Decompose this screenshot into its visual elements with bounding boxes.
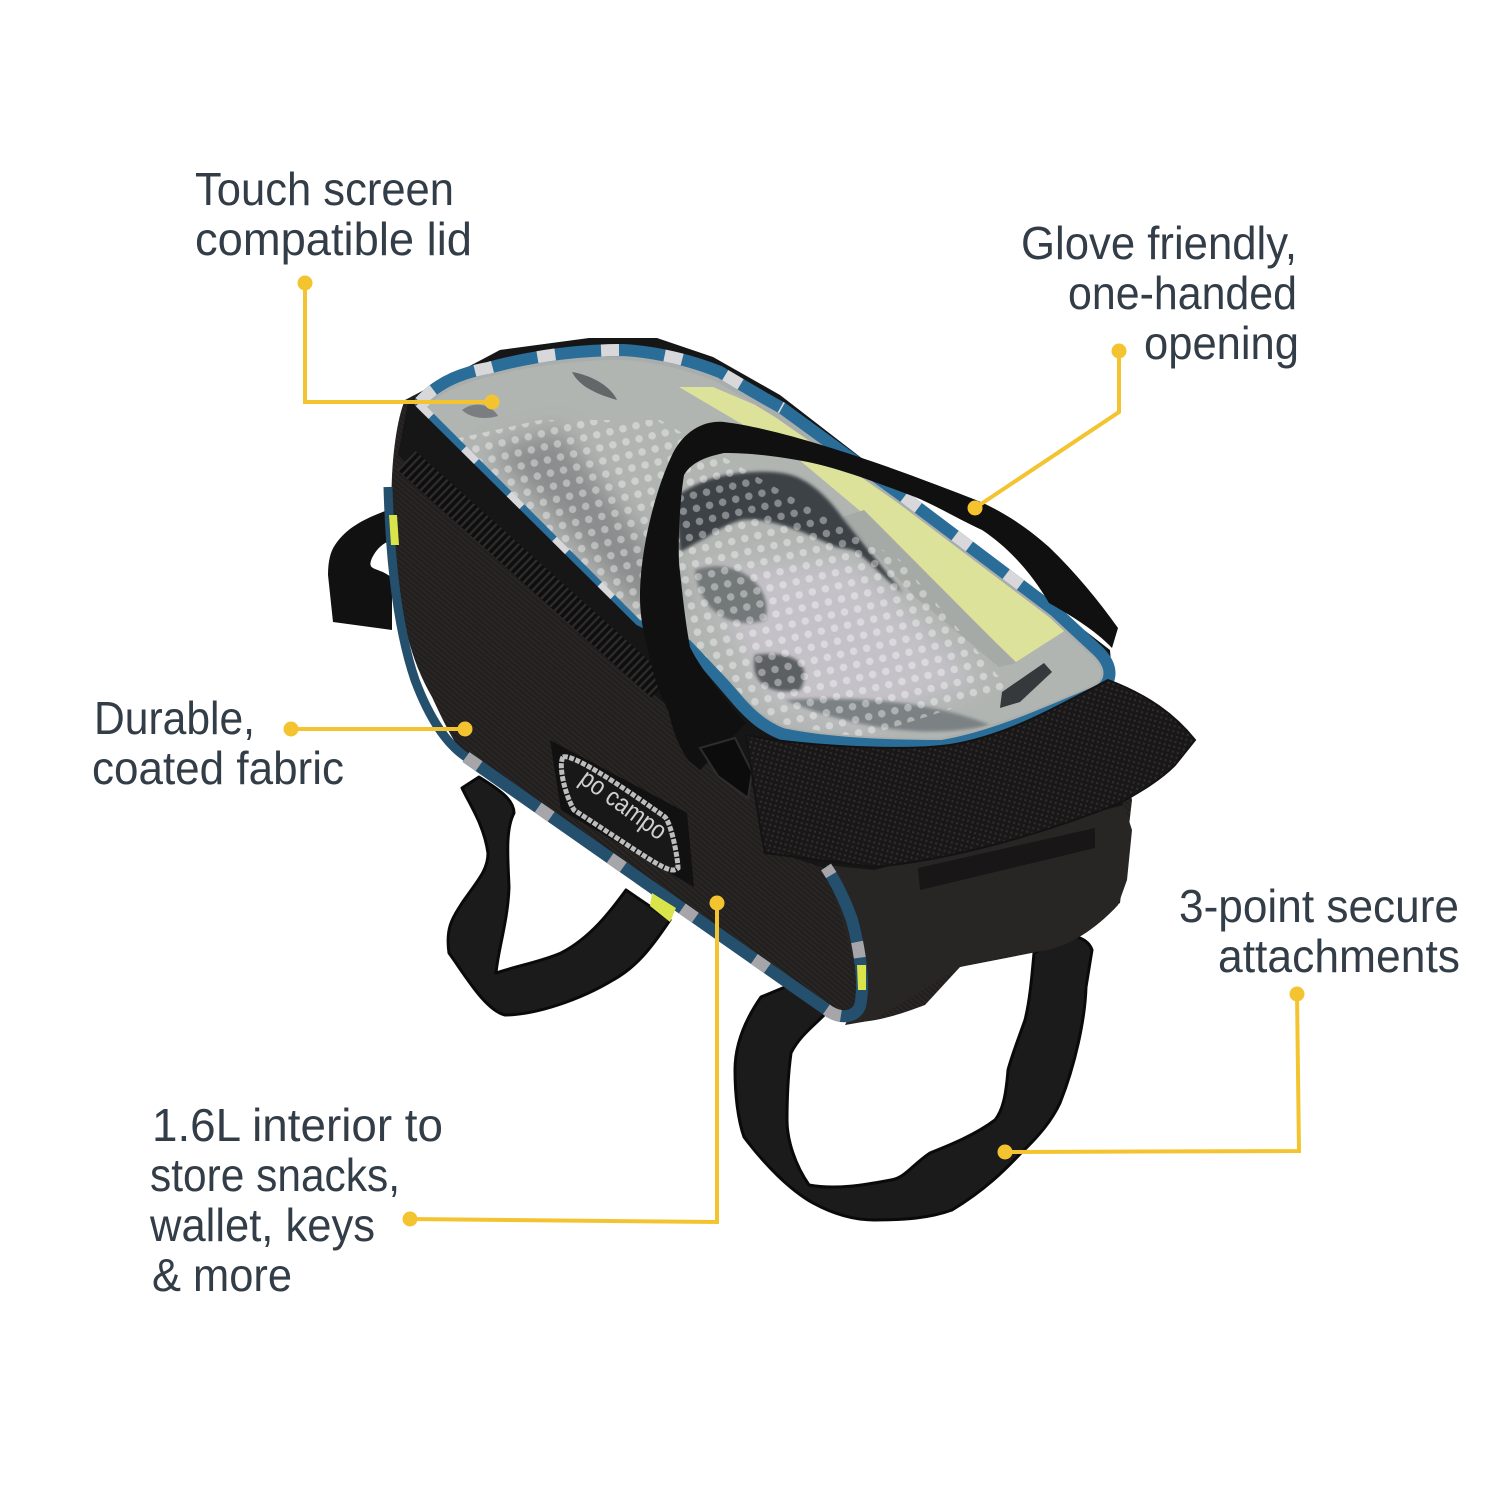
callout text: wallet, keys xyxy=(149,1199,375,1251)
callout text: opening xyxy=(1144,317,1299,369)
callout: touch screen lid xyxy=(195,163,500,410)
bottom right strap loop xyxy=(735,936,1092,1220)
callout text: 3-point secure xyxy=(1179,880,1459,932)
small rear strap loop xyxy=(328,510,392,630)
callout text: Glove friendly, xyxy=(1021,217,1297,269)
callout: glove friendly opening xyxy=(968,217,1299,516)
leader line xyxy=(305,283,492,402)
callout: interior storage xyxy=(149,896,724,1301)
callout text: compatible lid xyxy=(195,213,472,265)
callout text: 1.6L interior to xyxy=(152,1099,443,1151)
piping stripes xyxy=(466,757,862,1016)
hook and loop patch xyxy=(918,828,1095,890)
callout text: Durable, xyxy=(94,692,255,744)
callout: secure attachments xyxy=(998,880,1460,1160)
halftone dots xyxy=(450,420,1010,738)
leader line xyxy=(410,903,717,1222)
callout text: store snacks, xyxy=(150,1149,400,1201)
piping: left edge xyxy=(388,487,466,757)
neon accents xyxy=(389,515,866,990)
leader line xyxy=(1005,994,1299,1152)
infographic canvas xyxy=(94,172,1458,1292)
dark smudges xyxy=(695,566,767,623)
callout text: one-handed xyxy=(1068,267,1297,319)
callout: durable fabric xyxy=(92,692,472,794)
shaded centre xyxy=(490,430,690,610)
top edge of panel xyxy=(398,338,1125,880)
leader line xyxy=(291,727,465,731)
callout text: & more xyxy=(152,1249,292,1301)
zipper xyxy=(406,460,660,688)
dark reflection xyxy=(675,472,903,593)
lower right end panel xyxy=(826,805,1132,1025)
callout text: attachments xyxy=(1218,930,1460,982)
side panel fabric xyxy=(392,340,1132,1022)
zipper pull xyxy=(700,738,752,798)
callout text: Touch screen xyxy=(195,163,454,215)
grey band xyxy=(842,510,1016,667)
carry handle strap xyxy=(640,422,1118,770)
lid piping xyxy=(420,350,1109,746)
window contents xyxy=(427,372,1064,737)
piping stripes xyxy=(420,350,1055,620)
piping: bottom edge xyxy=(466,757,862,1016)
bottom left strap loop xyxy=(448,777,670,1015)
leader line xyxy=(975,351,1119,508)
callout text: coated fabric xyxy=(92,742,344,794)
mesh front flap xyxy=(746,680,1195,867)
brand patch xyxy=(550,740,694,887)
brand logo text: po campo xyxy=(574,763,673,846)
yellow insert xyxy=(679,387,1066,662)
transparent touch screen lid xyxy=(400,340,1120,760)
bag body xyxy=(388,338,1132,1025)
lavender panel xyxy=(700,560,980,725)
